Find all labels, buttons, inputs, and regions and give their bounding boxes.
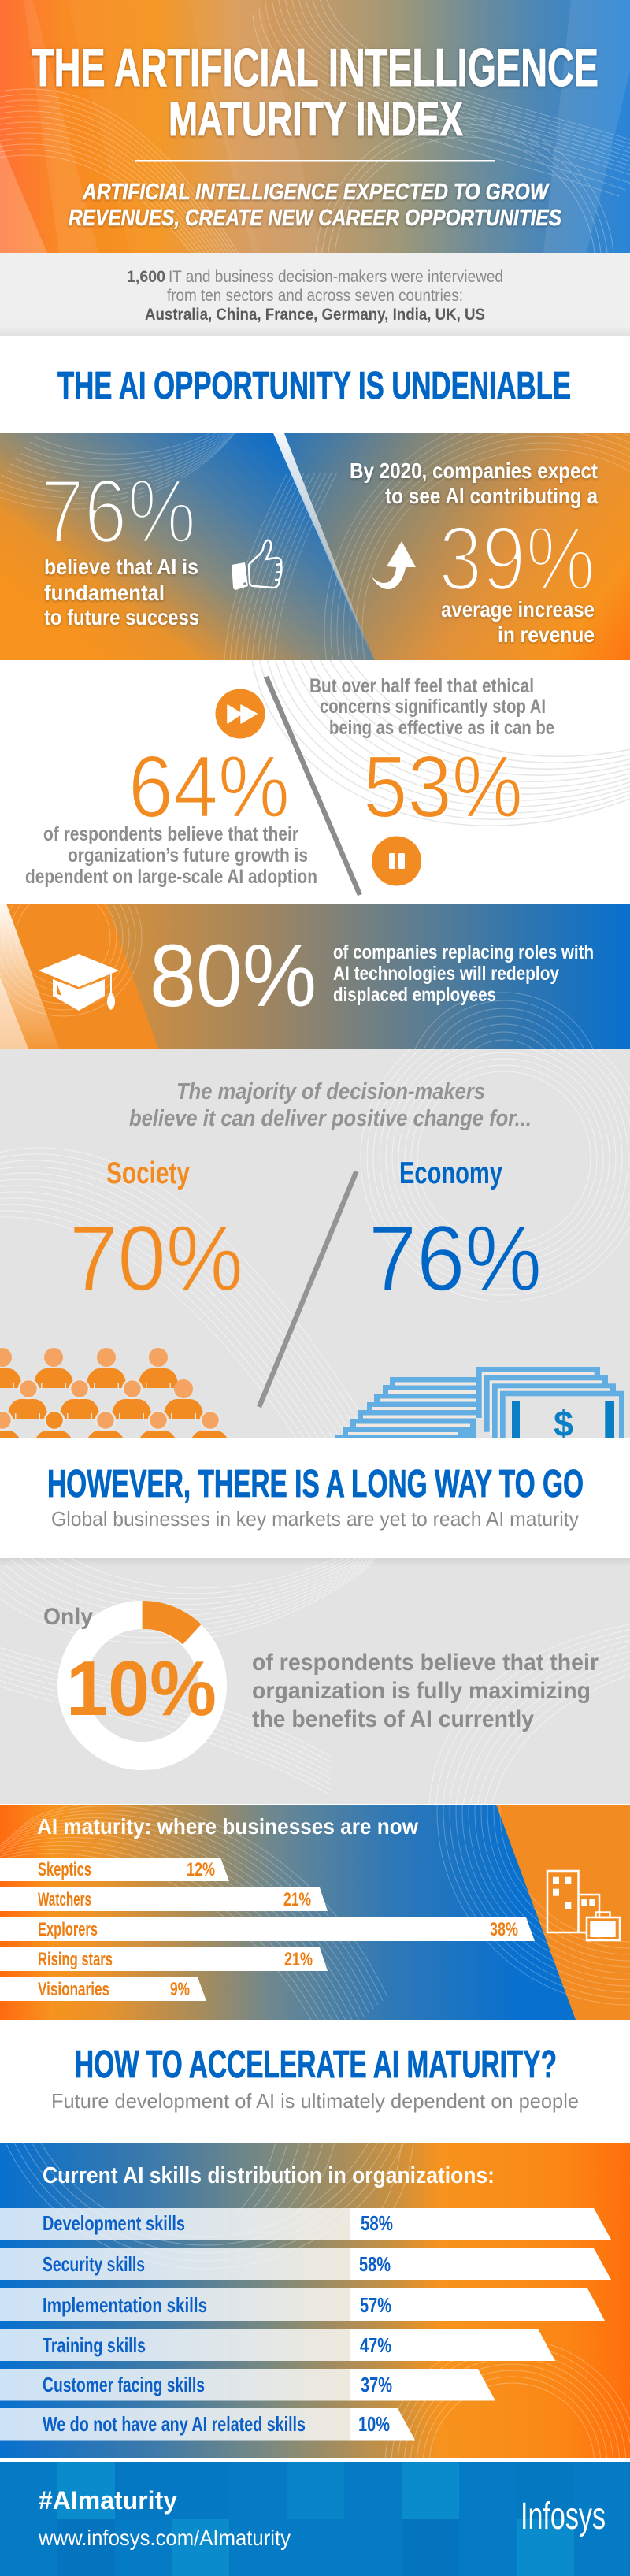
panel: survey summary — [0, 253, 630, 336]
heading: AI maturity: AI maturity: where businesses are now — [37, 1814, 418, 1839]
stat: 80 percent: 80% — [150, 926, 317, 1025]
bar: customer facing skills — [0, 2369, 495, 2401]
text: ethical concerns — [309, 675, 554, 739]
subtitle: ARTIFICIAL INTELLIGENCE EXPECTED TO GROW — [82, 180, 550, 205]
bar: no AI skills: 10% — [358, 2412, 390, 2436]
text: average increase: in revenue — [498, 622, 595, 647]
text: fully maximizing: of respondents believe that their — [252, 1650, 598, 1676]
text: believe AI fundamental: to future success — [44, 605, 199, 629]
panel: only 10 percent — [0, 1558, 630, 1804]
panel: 76 percent and 39 percent — [0, 388, 630, 849]
bar: customer facing skills: Customer facing skills — [43, 2373, 205, 2396]
stat: 53 percent: 53% — [363, 738, 523, 836]
panel: society and economy — [0, 1015, 630, 1511]
bar: skeptics — [0, 1858, 229, 1881]
bar: implementation skills: Implementation skills — [43, 2293, 207, 2317]
panel: AI skills distribution — [0, 2143, 630, 2458]
bar: watchers: 21% — [284, 1889, 311, 1910]
bar: security skills — [0, 2248, 611, 2280]
stat: 64 percent: 64% — [128, 738, 290, 836]
panel: survey summary: from ten sectors and across seven countries: — [167, 287, 463, 305]
stat: 76 percent: 76% — [41, 460, 196, 562]
subtitle — [69, 180, 562, 231]
text: believe AI fundamental: believe that AI is — [44, 555, 198, 579]
text: believe AI fundamental: fundamental — [44, 581, 165, 605]
website url: www.infosys.com/AImaturity — [38, 2526, 291, 2550]
panel: survey summary: Australia, China, France, Germany, India, UK, US — [145, 306, 485, 324]
icon: stack of money: $ — [554, 1403, 573, 1444]
panel: survey summary: 1,600 — [127, 268, 165, 286]
header banner — [0, 0, 630, 418]
bar: rising stars: 21% — [284, 1949, 313, 1970]
bar: watchers: Watchers — [38, 1889, 91, 1910]
bar: development skills — [0, 2208, 611, 2240]
bar: security skills: Security skills — [43, 2252, 145, 2276]
text: companies expect: to see AI contributing a — [385, 484, 598, 508]
heading: long way to go: Global businesses in key markets are yet to reach AI maturity — [51, 1507, 579, 1531]
icon: graduation cap — [39, 954, 119, 1011]
bar: visionaries — [0, 1977, 206, 2001]
label: only: Only — [43, 1604, 93, 1630]
title: MATURITY INDEX — [169, 92, 463, 146]
title — [32, 38, 598, 146]
donut chart: 10 percent — [72, 1601, 213, 1756]
bar: rising stars — [0, 1947, 328, 1971]
text: fully maximizing: organization is fully maximizing — [252, 1678, 591, 1704]
icon: fast forward — [216, 689, 265, 739]
bar: training skills: 47% — [360, 2333, 391, 2357]
label: society: Society — [106, 1156, 190, 1190]
text: believe AI fundamental — [44, 555, 199, 629]
text: growth dependency: organization’s future growth is — [68, 844, 308, 867]
heading: how to accelerate: Future development of AI is ultimately dependent on people — [51, 2089, 579, 2113]
text: majority of decision-makers — [129, 1079, 532, 1131]
icon: crowd of people — [0, 1348, 227, 1438]
bar: development skills: Development skills — [43, 2211, 185, 2235]
text: majority of decision-makers: believe it can deliver positive change for... — [129, 1106, 532, 1131]
bar: watchers — [0, 1887, 328, 1911]
bar: training skills: Training skills — [43, 2333, 146, 2357]
text: fully maximizing — [252, 1650, 598, 1732]
icon: pause — [372, 837, 421, 885]
bar: implementation skills: 57% — [360, 2293, 391, 2317]
text: fully maximizing: the benefits of AI currently — [252, 1706, 534, 1732]
panel: 80 percent redeploy — [0, 904, 630, 1049]
bar: skeptics: 12% — [187, 1859, 215, 1880]
bar: customer facing skills: 37% — [361, 2373, 392, 2396]
stat: economy 76 percent: 76% — [369, 1207, 542, 1311]
icon: buildings and briefcase — [547, 1871, 620, 1940]
bar: development skills: 58% — [361, 2211, 393, 2235]
stat: society 70 percent: 70% — [69, 1207, 243, 1311]
text: ethical concerns: concerns significantly stop AI — [320, 696, 546, 718]
text: redeploy employees — [333, 941, 594, 1006]
bar: security skills: 58% — [359, 2252, 391, 2276]
text: average increase: average increase — [441, 597, 595, 622]
panel: survey summary: IT and business decision-makers were interviewed — [169, 268, 503, 286]
bar: no AI skills: We do not have any AI related skills — [43, 2412, 306, 2436]
footer — [0, 2462, 630, 2576]
text: growth dependency — [25, 823, 317, 888]
text: average increase — [441, 597, 595, 647]
bar: visionaries: Visionaries — [38, 1979, 109, 2000]
text: companies expect: By 2020, companies expect — [350, 458, 598, 483]
heading: how to accelerate — [51, 2043, 579, 2113]
text: growth dependency: of respondents believe that their — [43, 823, 298, 845]
bar: no AI skills — [0, 2408, 415, 2441]
heading: long way to go — [47, 1463, 584, 1531]
panel: 64 percent and 53 percent — [0, 591, 630, 904]
label: economy: Economy — [399, 1156, 502, 1190]
icon: up arrow — [372, 541, 416, 589]
bar: training skills — [0, 2329, 555, 2361]
bar: rising stars: Rising stars — [38, 1949, 113, 1970]
stat: 39 percent: 39% — [439, 507, 595, 610]
bar: visionaries: 9% — [170, 1979, 190, 2000]
stat: 10 percent: 10% — [66, 1645, 217, 1732]
bar: skeptics: Skeptics — [38, 1859, 91, 1880]
text: ethical concerns: But over half feel that ethical — [309, 675, 534, 697]
bar: explorers: Explorers — [38, 1919, 98, 1940]
text: ethical concerns: being as effective as it can be — [329, 717, 554, 739]
icon: stack of money — [335, 1367, 624, 1444]
icon: thumbs up — [232, 540, 281, 590]
text: companies expect — [350, 458, 598, 508]
text: redeploy employees: AI technologies will redeploy — [333, 963, 559, 985]
text: majority of decision-makers: The majority of decision-makers — [176, 1079, 485, 1104]
text: redeploy employees: displaced employees — [333, 984, 496, 1006]
bar: explorers: 38% — [490, 1919, 518, 1940]
panel: AI maturity — [0, 1805, 630, 2020]
bar: explorers — [0, 1917, 535, 1941]
heading: skills: Current AI skills distribution in organizations: — [43, 2163, 495, 2188]
hashtag: #AImaturity — [39, 2486, 177, 2515]
text: growth dependency: dependent on large-scale AI adoption — [25, 866, 317, 888]
bar: implementation skills — [0, 2288, 605, 2321]
